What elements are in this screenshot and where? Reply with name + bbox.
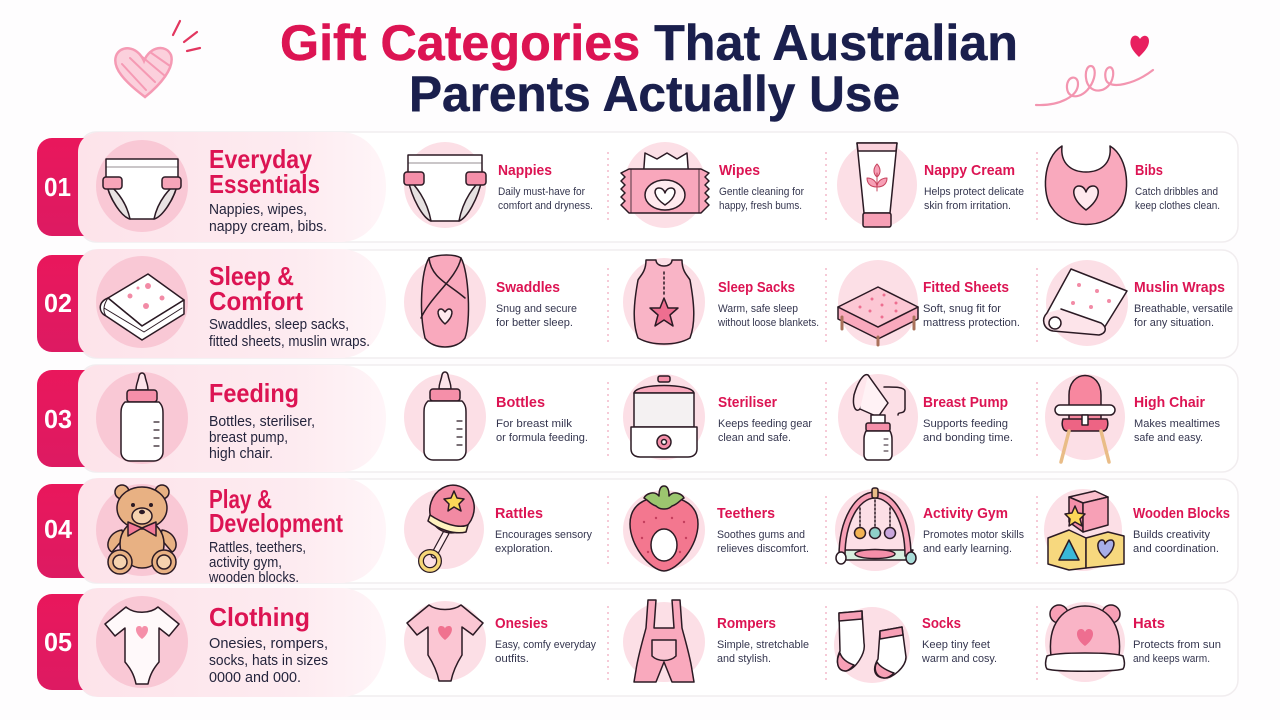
panel: row 4 Play and Development <box>37 478 1238 586</box>
item text: nappies: comfort and dryness. <box>498 200 593 212</box>
category summary <box>209 636 328 686</box>
icon: sleep sack <box>623 258 705 346</box>
category heading <box>209 144 320 199</box>
item text: muslin wraps: Breathable, versatile <box>1134 303 1233 315</box>
title <box>280 15 1018 122</box>
number tab 02 <box>37 255 90 352</box>
number tab 04: 04 <box>44 514 73 544</box>
icon: teddy bear <box>96 484 188 576</box>
item text: high chair: safe and easy. <box>1134 432 1203 444</box>
category summary: fitted sheets, muslin wraps. <box>209 334 370 350</box>
panel: row 5 Clothing <box>37 588 1238 697</box>
icon: nappies <box>404 142 486 228</box>
item text: onesies <box>495 615 596 665</box>
row card <box>80 589 1238 696</box>
item text: swaddles: Swaddles <box>496 279 560 296</box>
row card <box>80 250 1238 358</box>
item text: hats: Protects from sun <box>1133 639 1221 651</box>
item text: nappy cream <box>924 162 1024 212</box>
icon: sketched heart top left <box>115 21 200 97</box>
icon: bottle large <box>96 372 188 464</box>
item text: activity gym: Promotes motor skills <box>923 529 1024 541</box>
item text: fitted sheets: Fitted Sheets <box>923 279 1009 296</box>
panel: row 3 Feeding <box>37 365 1238 472</box>
row card <box>80 132 1238 242</box>
category summary: wooden blocks. <box>208 570 299 586</box>
icon: nappy large <box>96 140 188 232</box>
item text: swaddles <box>496 279 577 329</box>
icon: bib <box>1045 146 1127 224</box>
item text: socks: Socks <box>922 615 961 632</box>
item text: muslin wraps: Muslin Wraps <box>1134 279 1225 296</box>
item text: nappy cream: Nappy Cream <box>924 162 1015 179</box>
item text: muslin wraps: for any situation. <box>1134 317 1214 329</box>
icon: fitted sheet <box>838 260 918 346</box>
icon: activity gym <box>835 488 916 571</box>
item text: swaddles: Snug and secure <box>496 303 577 315</box>
item text: breast pump: Breast Pump <box>923 394 1008 411</box>
item text: nappies <box>498 162 593 212</box>
category heading: Clothing <box>209 602 310 632</box>
title: Parents Actually Use <box>409 66 900 122</box>
item text: hats: and keeps warm. <box>1133 653 1210 665</box>
category panel <box>78 478 386 583</box>
item text: teethers: relieves discomfort. <box>717 543 809 555</box>
item text: teethers: Soothes gums and <box>717 529 805 541</box>
number tab 03: 03 <box>44 404 72 434</box>
row card <box>80 479 1238 583</box>
item text: rattles: exploration. <box>495 543 553 555</box>
category summary: Nappies, wipes, <box>209 202 307 218</box>
item text: breast pump: Supports feeding <box>923 418 1008 430</box>
item text: bottles: For breast milk <box>496 418 573 430</box>
item text: bottles: or formula feeding. <box>496 432 588 444</box>
category heading <box>209 484 343 538</box>
category heading: Everyday <box>209 144 312 174</box>
icon: bottle <box>404 372 486 460</box>
number tab 02: 02 <box>44 288 72 318</box>
item text: nappy cream: skin from irritation. <box>924 200 1011 212</box>
item text: bibs: keep clothes clean. <box>1135 200 1220 212</box>
icon: onesie large <box>96 596 188 688</box>
icon: baby hat <box>1045 602 1125 682</box>
item text: wipes: happy, fresh bums. <box>719 200 802 212</box>
item text: wipes: Gentle cleaning for <box>719 186 804 198</box>
item text: nappies: Daily must-have for <box>498 186 585 198</box>
item text: sleep sacks: Sleep Sacks <box>718 279 795 296</box>
icon: romper <box>623 600 705 682</box>
item text: activity gym: Activity Gym <box>923 505 1008 522</box>
item text: socks: warm and cosy. <box>921 653 997 665</box>
item text: teethers: Teethers <box>717 505 775 522</box>
item text: rompers: Simple, stretchable <box>717 639 809 651</box>
category summary: high chair. <box>209 446 273 462</box>
category heading: Comfort <box>209 286 303 316</box>
item text: socks <box>921 615 997 665</box>
icon: heart and curly ribbon top right <box>1036 36 1153 105</box>
item text: high chair <box>1134 394 1221 444</box>
item text: breast pump: and bonding time. <box>923 432 1013 444</box>
category summary: 0000 and 000. <box>209 670 301 686</box>
icon: breast pump <box>838 374 918 460</box>
item text: breast pump <box>923 394 1013 444</box>
item text: nappies: Nappies <box>498 162 552 179</box>
item text: wooden blocks: Wooden Blocks <box>1133 505 1230 522</box>
item text: sleep sacks: without loose blankets. <box>717 317 819 329</box>
category panel <box>78 249 386 358</box>
item text: rompers: Rompers <box>717 615 776 632</box>
number tab 05 <box>37 594 90 690</box>
item text: wipes: Wipes <box>719 162 760 179</box>
item text: rompers: and stylish. <box>717 653 771 665</box>
number tab 01 <box>37 138 90 236</box>
category summary <box>209 202 327 235</box>
category summary: socks, hats in sizes <box>209 653 328 669</box>
item text: onesies: outfits. <box>495 653 529 665</box>
category summary: Bottles, steriliser, <box>209 414 315 430</box>
item text: steriliser: clean and safe. <box>718 432 791 444</box>
row card <box>80 365 1238 472</box>
item text: high chair: Makes mealtimes <box>1134 418 1221 430</box>
item text: fitted sheets: mattress protection. <box>923 317 1020 329</box>
number tab 04 <box>37 484 90 578</box>
item text: sleep sacks: Warm, safe sleep <box>718 303 798 315</box>
category panel <box>78 588 386 697</box>
icon: rattle <box>404 479 484 570</box>
category heading: Essentials <box>209 169 320 199</box>
item text: rattles <box>495 505 592 555</box>
item text: socks: Keep tiny feet <box>922 639 990 651</box>
icon: onesie <box>404 601 486 681</box>
item text: wooden blocks: and coordination. <box>1133 543 1219 555</box>
item text: bottles <box>496 394 588 444</box>
item text: bibs <box>1135 162 1220 212</box>
number tab 01: 01 <box>44 172 71 202</box>
category heading <box>209 261 303 316</box>
item text: bottles: Bottles <box>496 394 545 411</box>
item text: rompers <box>717 615 809 665</box>
item text: swaddles: for better sleep. <box>496 317 573 329</box>
category heading: Development <box>209 508 343 538</box>
category summary <box>208 540 306 586</box>
icon: high chair <box>1045 374 1125 462</box>
item text: wipes <box>719 162 804 212</box>
number tab 05: 05 <box>44 627 72 657</box>
icon: nappy cream <box>837 142 917 228</box>
item text: teethers <box>717 505 809 555</box>
category panel <box>78 365 386 472</box>
icon: swaddle <box>404 255 486 347</box>
icon: muslin wrap <box>1044 260 1128 346</box>
item text: wooden blocks: Builds creativity <box>1133 529 1210 541</box>
category summary <box>209 414 315 462</box>
category summary: Rattles, teethers, <box>209 540 306 556</box>
category heading: Play & <box>209 484 272 514</box>
category heading: Sleep & <box>209 261 294 291</box>
category summary: Onesies, rompers, <box>209 636 328 652</box>
item text: muslin wraps <box>1134 279 1233 329</box>
item text: onesies: Easy, comfy everyday <box>495 639 596 651</box>
icon: steriliser <box>623 374 705 460</box>
item text: nappy cream: Helps protect delicate <box>924 186 1024 198</box>
item text: activity gym: and early learning. <box>923 543 1012 555</box>
item text: wooden blocks <box>1133 505 1230 555</box>
number tab 03 <box>37 370 90 467</box>
item text: onesies: Onesies <box>495 615 548 632</box>
title: Gift Categories That Australian <box>280 15 1018 71</box>
category panel <box>78 132 386 242</box>
item text: steriliser: Keeps feeding gear <box>718 418 812 430</box>
category summary: nappy cream, bibs. <box>209 219 327 235</box>
category summary <box>209 317 370 350</box>
item text: fitted sheets <box>923 279 1020 329</box>
icon: wooden blocks <box>1044 489 1124 571</box>
item text: rattles: Encourages sensory <box>495 529 592 541</box>
item text: bibs: Bibs <box>1135 162 1163 179</box>
category summary: Swaddles, sleep sacks, <box>209 317 349 333</box>
item text: hats <box>1133 615 1221 665</box>
item text: rattles: Rattles <box>495 505 543 522</box>
item text: activity gym <box>923 505 1024 555</box>
panel: row 2 Sleep and Comfort <box>37 249 1238 358</box>
item text: high chair: High Chair <box>1134 394 1205 411</box>
icon: socks <box>834 607 910 683</box>
item text: fitted sheets: Soft, snug fit for <box>923 303 1001 315</box>
category heading: Feeding <box>209 378 299 408</box>
icon: wipes <box>621 142 709 228</box>
icon: strawberry teether <box>623 486 705 571</box>
category summary: breast pump, <box>209 430 288 446</box>
item text: bibs: Catch dribbles and <box>1135 186 1218 198</box>
item text: steriliser <box>718 394 812 444</box>
item text: steriliser: Steriliser <box>718 394 777 411</box>
item text: sleep sacks <box>717 279 819 329</box>
item text: hats: Hats <box>1133 615 1165 632</box>
panel: row 1 Everyday Essentials <box>37 132 1238 242</box>
icon: folded blanket <box>96 256 188 348</box>
category summary: activity gym, <box>209 555 282 571</box>
